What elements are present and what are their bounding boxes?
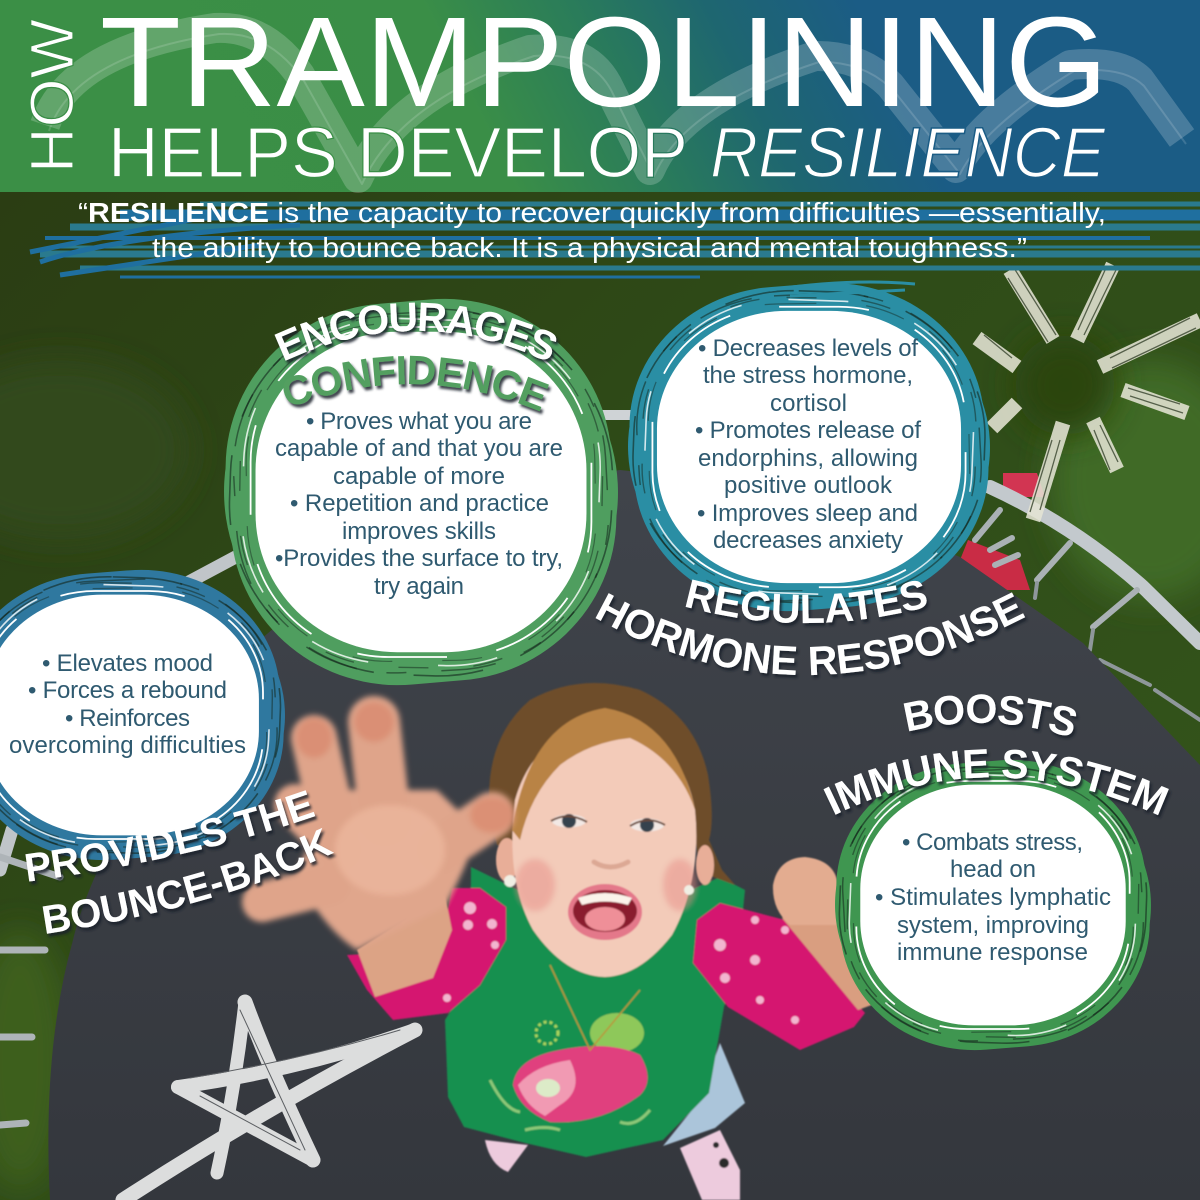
body text: improves skills xyxy=(342,518,496,545)
panel: boosts immune system xyxy=(824,694,1172,1050)
girl: nose xyxy=(594,862,628,867)
heading: immune system: IMMUNE SYSTEM xyxy=(824,749,1172,819)
quote text: the ability to bounce back. It is a physical and mental toughness.” xyxy=(152,232,1027,263)
heading: HELPS DEVELOP: HELPS DEVELOP xyxy=(108,114,688,193)
panel: provides the bounce-back xyxy=(0,570,337,938)
girl: face xyxy=(512,725,696,977)
chalk star: bottom left xyxy=(123,1002,415,1200)
body text: • Combats stress, xyxy=(902,829,1083,856)
bouncing swoosh xyxy=(45,28,1186,184)
heading: RESILIENCE: RESILIENCE xyxy=(710,114,1107,193)
panel: encourages confidence xyxy=(224,298,618,686)
body text xyxy=(875,829,1111,966)
body text: head on xyxy=(950,856,1036,883)
trampoline mat xyxy=(48,470,1200,1200)
body text: • Forces a rebound xyxy=(28,677,227,704)
girl: pink sleeves xyxy=(347,888,865,1050)
girl: earrings xyxy=(504,875,694,895)
body text: the stress hormone, xyxy=(703,362,913,389)
girl: eyes xyxy=(551,814,665,832)
quote brush stripes xyxy=(30,204,1200,277)
girl: mouth xyxy=(568,884,642,940)
heading: provides the: PROVIDES THE xyxy=(25,790,319,886)
body text: • Improves sleep and xyxy=(697,500,918,527)
body text: • Reinforces xyxy=(65,705,190,732)
trampoline frame and springs xyxy=(0,415,1200,1125)
body text xyxy=(695,335,921,554)
body text: immune response xyxy=(897,939,1088,966)
girl: right arm and hand xyxy=(773,857,885,1010)
body text: overcoming difficulties xyxy=(9,732,246,759)
body text: cortisol xyxy=(770,390,847,417)
panel: regulates hormone response xyxy=(596,280,1028,680)
heading: bounce-back: BOUNCE-BACK xyxy=(42,828,337,938)
chalk star: top right xyxy=(977,265,1200,520)
body text: decreases anxiety xyxy=(713,527,903,554)
body text: • Decreases levels of xyxy=(698,335,918,362)
quote text xyxy=(78,197,1106,263)
girl: shirt print xyxy=(490,965,650,1130)
heading: boosts: BOOSTS xyxy=(904,694,1079,740)
body text: • Repetition and practice xyxy=(290,490,549,517)
heading: hormone response: HORMONE RESPONSE xyxy=(596,592,1028,680)
body text: •Provides the surface to try, xyxy=(275,545,563,572)
heading: confidence: CONFIDENCE xyxy=(283,356,552,416)
girl: left hand xyxy=(262,702,514,950)
girl: socks and shorts xyxy=(485,1043,745,1200)
girl: left arm xyxy=(357,895,452,997)
body text: try again xyxy=(374,573,464,600)
body text: capable of and that you are xyxy=(275,435,563,462)
heading: regulates: REGULATES xyxy=(686,580,930,628)
girl: fringe xyxy=(512,708,695,840)
photo: girl reaching up xyxy=(262,683,885,1200)
body text xyxy=(9,650,246,759)
girl: ears xyxy=(496,838,714,885)
body text: • Stimulates lymphatic xyxy=(875,884,1111,911)
heading word: HOW: HOW xyxy=(18,19,86,173)
header band xyxy=(0,0,1200,193)
body text: capable of more xyxy=(333,463,505,490)
body text: • Elevates mood xyxy=(42,650,213,677)
body text: • Proves what you are xyxy=(306,408,532,435)
girl: hair back xyxy=(489,683,735,885)
quote text: “RESILIENCE is the capacity to recover quickly from difficulties —essentially, xyxy=(78,197,1106,228)
body text: endorphins, allowing xyxy=(698,445,918,472)
star rays xyxy=(977,265,1200,520)
brush ring: green xyxy=(825,750,1161,1060)
ring tail xyxy=(770,282,915,296)
girl: cheeks xyxy=(515,859,697,911)
body text: • Promotes release of xyxy=(695,417,921,444)
body text: system, improving xyxy=(897,912,1089,939)
girl: green shirt xyxy=(445,867,745,1157)
brush ring: blue xyxy=(0,560,295,870)
body text xyxy=(275,408,563,600)
brush ring: green xyxy=(212,285,630,699)
body text: positive outlook xyxy=(724,472,893,499)
heading: encourages: ENCOURAGES xyxy=(274,302,560,365)
brush ring: teal xyxy=(617,271,1001,623)
